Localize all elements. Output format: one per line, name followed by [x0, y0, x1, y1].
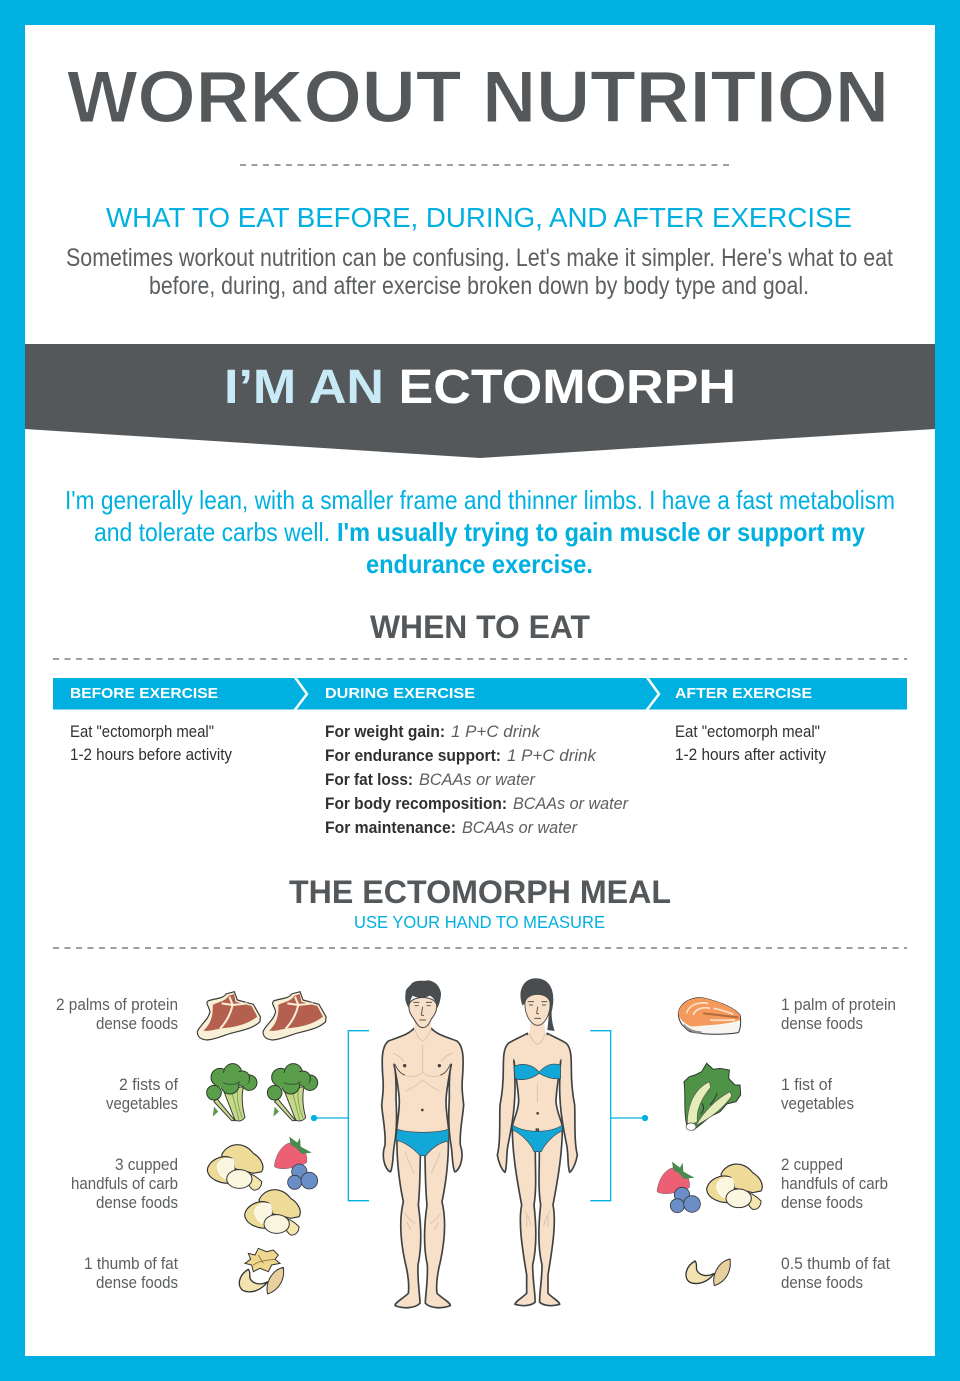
female torso — [512, 1022, 562, 1128]
during exercise text: BCAAs or water — [513, 794, 629, 813]
female portion labels: 1 fist of — [781, 1075, 832, 1094]
female food icons — [657, 998, 762, 1286]
male portion labels: dense foods — [96, 1014, 178, 1033]
banner — [25, 344, 935, 458]
male head — [409, 997, 437, 1028]
icon: broccoli — [207, 1064, 318, 1121]
icon: lettuce — [684, 1063, 741, 1130]
before exercise text: Eat "ectomorph meal" — [70, 722, 214, 741]
intro text: before, during, and after exercise broken down by body type and goal. — [149, 272, 809, 300]
male portion labels: dense foods — [96, 1193, 178, 1212]
male portion labels — [56, 995, 178, 1292]
female portion labels: handfuls of carb — [781, 1174, 888, 1193]
male portion labels: 3 cupped — [115, 1155, 178, 1174]
icon: cashew and almond — [686, 1259, 730, 1286]
female bikini top — [514, 1064, 561, 1080]
during exercise text: For weight gain: — [325, 722, 445, 741]
icon: berries and potato — [657, 1162, 762, 1213]
after exercise text — [675, 722, 826, 764]
icon: steaks — [197, 992, 326, 1040]
female figure — [497, 978, 577, 1306]
during exercise text: BCAAs or water — [419, 770, 536, 789]
female hair back — [520, 978, 555, 1031]
female face — [528, 1002, 547, 1018]
icon: nuts — [239, 1248, 284, 1294]
male underwear — [396, 1129, 449, 1156]
before exercise text: 1-2 hours before activity — [70, 745, 232, 764]
banner heading: I’M AN ECTOMORPH — [224, 361, 736, 414]
timeline bar: DURING EXERCISE — [325, 685, 475, 702]
female portion labels: 0.5 thumb of fat — [781, 1254, 890, 1273]
female head — [525, 994, 550, 1025]
male portion labels: 2 fists of — [119, 1075, 178, 1094]
timeline bar: BEFORE EXERCISE — [70, 685, 218, 702]
during exercise text: 1 P+C drink — [451, 722, 541, 741]
sub-heading: hand measure: USE YOUR HAND TO MEASURE — [354, 912, 605, 932]
during exercise text: For maintenance: — [325, 818, 456, 837]
male portion labels: vegetables — [106, 1094, 178, 1113]
female portion labels — [781, 995, 896, 1292]
body type description: I'm usually trying to gain muscle or support my — [337, 517, 865, 547]
subtitle: WHAT TO EAT BEFORE, DURING, AND AFTER EXERCISE — [106, 202, 852, 233]
after exercise text: 1-2 hours after activity — [675, 745, 826, 764]
after exercise text: Eat "ectomorph meal" — [675, 722, 820, 741]
timeline bar — [53, 676, 907, 711]
heading: when to eat: WHEN TO EAT — [370, 609, 590, 645]
body type description: endurance exercise. — [366, 549, 593, 579]
male portion labels: dense foods — [96, 1273, 178, 1292]
body type description: and tolerate carbs well. — [94, 517, 330, 547]
during exercise text: For fat loss: — [325, 770, 413, 789]
female portion labels: dense foods — [781, 1014, 863, 1033]
female bracket — [590, 1031, 648, 1201]
male portion labels: 2 palms of protein — [56, 995, 178, 1014]
female portion labels: 2 cupped — [781, 1155, 843, 1174]
female portion labels: 1 palm of protein — [781, 995, 896, 1014]
male portion labels: handfuls of carb — [71, 1174, 178, 1193]
male figure — [382, 980, 464, 1308]
female portion labels: dense foods — [781, 1193, 863, 1212]
during exercise text: 1 P+C drink — [507, 746, 597, 765]
male face — [413, 1002, 432, 1020]
male portion labels: 1 thumb of fat — [84, 1254, 178, 1273]
female bikini bottom — [512, 1125, 563, 1152]
icon: potatoes and berries — [207, 1137, 318, 1235]
female hair top — [522, 979, 552, 1006]
before exercise text — [70, 722, 232, 764]
male torso — [393, 1020, 452, 1135]
during exercise text: For body recomposition: — [325, 794, 507, 813]
female portion labels: vegetables — [781, 1094, 854, 1113]
female portion labels: dense foods — [781, 1273, 863, 1292]
icon: salmon — [678, 998, 741, 1034]
male hair — [405, 980, 441, 1008]
body type description — [65, 485, 895, 579]
title: WORKOUT NUTRITION — [67, 57, 889, 138]
during exercise text: For endurance support: — [325, 746, 501, 765]
heading: the ectomorph meal: THE ECTOMORPH MEAL — [289, 874, 671, 910]
male food icons — [197, 992, 326, 1294]
male bracket — [312, 1031, 369, 1201]
timeline bar: AFTER EXERCISE — [675, 685, 812, 702]
during exercise text: BCAAs or water — [462, 818, 578, 837]
intro text — [66, 244, 893, 300]
during exercise text — [325, 722, 629, 837]
